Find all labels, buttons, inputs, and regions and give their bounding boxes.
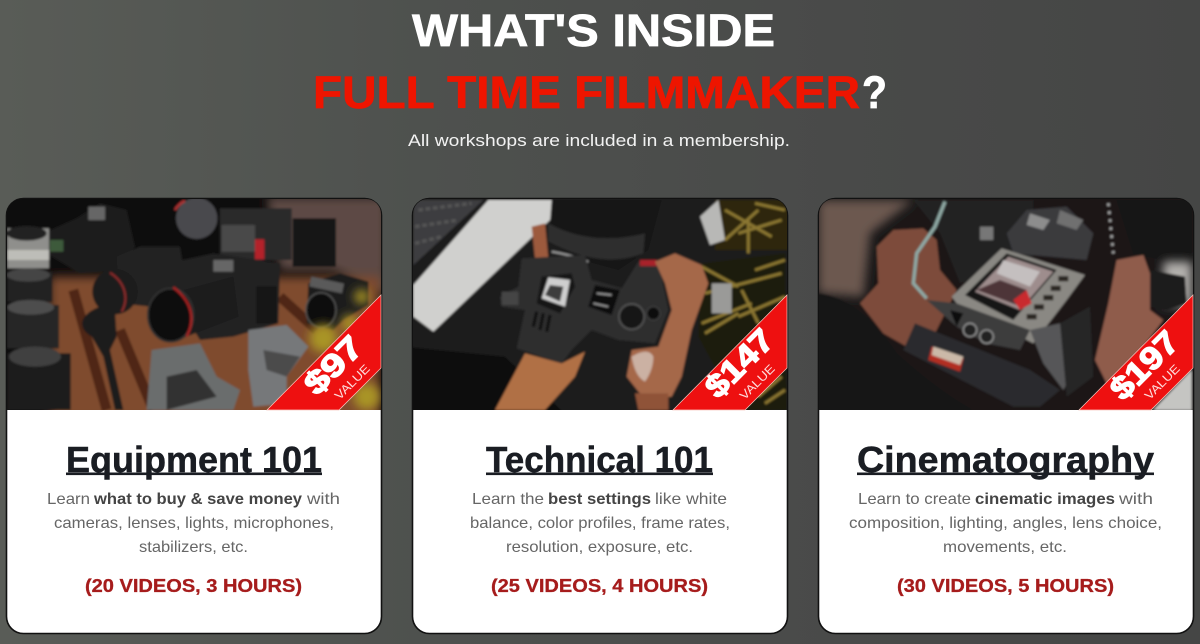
- photo: cinema camera rig with monitor: [819, 199, 1193, 410]
- lower rig: [927, 300, 1030, 350]
- top rig: [1007, 207, 1093, 260]
- description: with: [306, 491, 340, 508]
- description: best settings: [548, 491, 651, 508]
- hand right: [627, 253, 708, 400]
- camera: [500, 255, 668, 363]
- cable: [913, 202, 945, 298]
- fingers: [532, 223, 548, 258]
- right hand: [1095, 255, 1163, 383]
- laptop: [413, 200, 552, 332]
- ribbon: $147 value: $147: [698, 322, 781, 405]
- description: cinematic images: [975, 491, 1115, 508]
- shoulder foreground: [819, 293, 843, 302]
- description: Learn the: [472, 491, 544, 508]
- ribbon: $197 value: $197: [1103, 324, 1186, 407]
- heading: Technical 101: [486, 439, 713, 480]
- ribbon: $97 value: [267, 295, 381, 410]
- description: composition, lighting, angles, lens choice,: [849, 515, 1162, 532]
- description: [470, 491, 730, 556]
- middle camera: [117, 247, 187, 307]
- ribbon: $147 value: [673, 295, 787, 410]
- description: Learn to create: [858, 491, 971, 508]
- video count: (25 VIDEOS, 4 HOURS): [491, 575, 708, 596]
- panel: Technical 101 card: [405, 190, 805, 634]
- photo: cameras on wooden table: [7, 199, 381, 410]
- plant yellow: [309, 289, 380, 410]
- ribbon: $147 value: VALUE: [737, 362, 778, 403]
- gray gimbals: [147, 343, 240, 410]
- top right rig: [176, 198, 217, 239]
- main camera: [175, 253, 280, 340]
- ribbon: $197 value: [1079, 295, 1193, 410]
- description: what to buy & save money: [93, 491, 302, 508]
- description: [849, 491, 1162, 556]
- ribbon: $97 value: $97: [296, 328, 370, 402]
- title line 1: WHAT'S INSIDE: [412, 5, 775, 56]
- panel: Equipment 101 card: [0, 190, 400, 634]
- video count: (20 VIDEOS, 3 HOURS): [85, 575, 302, 596]
- video count: (30 VIDEOS, 5 HOURS): [897, 575, 1114, 596]
- photo: hands holding camera: [413, 199, 787, 410]
- title line 2: ?: [862, 67, 887, 118]
- heading: Cinematography: [857, 439, 1154, 480]
- description: [47, 491, 340, 556]
- lens: [548, 202, 554, 222]
- description: like white: [655, 491, 727, 508]
- left hand: [860, 228, 957, 347]
- description: balance, color profiles, frame rates,: [470, 515, 730, 532]
- panel: Cinematography card: [800, 190, 1200, 634]
- hand left: [495, 352, 585, 410]
- lens stack left: [7, 226, 71, 410]
- ribbon: $97 value: VALUE: [332, 362, 373, 403]
- plant pot: [715, 200, 788, 250]
- description: stabilizers, etc.: [139, 539, 248, 556]
- description: resolution, exposure, etc.: [506, 539, 693, 556]
- back camera: [51, 203, 136, 271]
- description: with: [1118, 491, 1153, 508]
- camera body: [952, 248, 1085, 343]
- subtitle: All workshops are included in a membership.: [408, 131, 790, 150]
- ribbon: $197 value: VALUE: [1142, 362, 1183, 403]
- microphone: [82, 307, 123, 410]
- title line 2: FULL TIME FILMMAKER: [313, 67, 860, 118]
- description: Learn: [47, 491, 90, 508]
- description: cameras, lenses, lights, microphones,: [54, 515, 334, 532]
- right small camera: [307, 273, 368, 330]
- heading: Equipment 101: [66, 439, 322, 480]
- description: movements, etc.: [943, 539, 1067, 556]
